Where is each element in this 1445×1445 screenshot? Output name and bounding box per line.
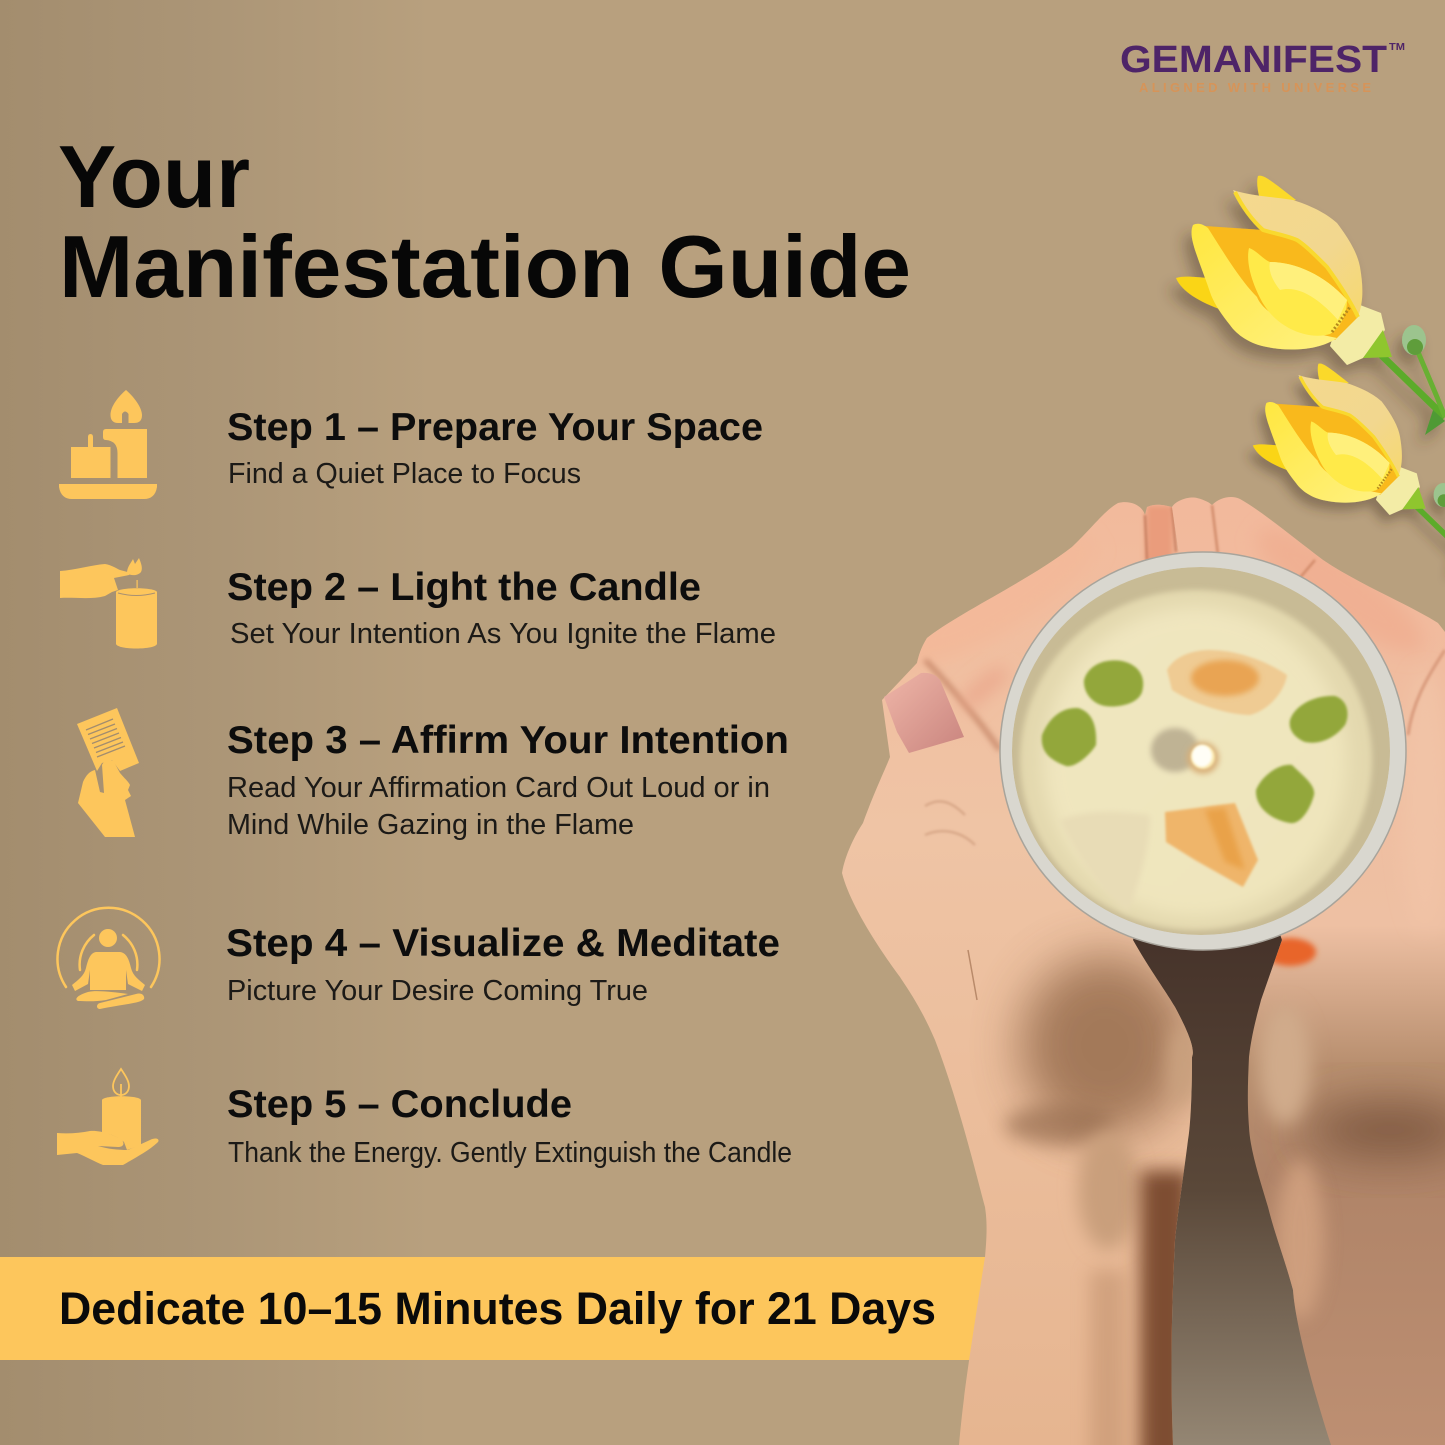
banner: daily commitment: Dedicate 10–15 Minutes Daily for 21 Days <box>59 1283 936 1334</box>
step 5 text <box>227 1083 792 1169</box>
step 4 text <box>226 922 780 1007</box>
orange crystal, bottom <box>1165 803 1258 887</box>
step 3 text: Read Your Affirmation Card Out Loud or in <box>227 772 770 804</box>
logo: Gemanifest: GEMANIFEST <box>1120 39 1387 81</box>
title: Your <box>58 127 250 226</box>
green crystals <box>1042 660 1348 823</box>
step 2 text <box>227 566 776 650</box>
candle tin rim <box>1000 552 1406 950</box>
icon: candles on tray <box>59 390 157 499</box>
flower branch, upper <box>1176 176 1445 435</box>
step 5 text: Thank the Energy. Gently Extinguish the Candle <box>228 1137 792 1169</box>
logo: Gemanifest: ALIGNED WITH UNIVERSE <box>1139 80 1371 95</box>
step 1 text: Find a Quiet Place to Focus <box>228 458 581 490</box>
banner: daily commitment <box>0 1257 990 1360</box>
step 1 text: Step 1 – Prepare Your Space <box>227 406 763 449</box>
icon: meditating figure <box>57 908 160 1009</box>
left thumb nail <box>884 673 964 753</box>
step 4 text: Picture Your Desire Coming True <box>227 975 648 1007</box>
right hand <box>1172 497 1445 1445</box>
step 1 text <box>227 406 763 490</box>
icon: hand lighting candle <box>60 558 157 648</box>
logo: Gemanifest: TM <box>1389 42 1405 53</box>
step 5 text: Step 5 – Conclude <box>227 1083 572 1126</box>
step 3 text: Step 3 – Affirm Your Intention <box>227 719 789 762</box>
step 3 text <box>227 719 789 841</box>
step 4 text: Step 4 – Visualize & Meditate <box>226 922 780 965</box>
wax crystal, pale <box>1068 814 1148 890</box>
candle wax surface <box>1012 567 1390 935</box>
wick dimple and flame <box>1151 728 1219 774</box>
left hand <box>842 502 1200 1445</box>
step 2 text: Set Your Intention As You Ignite the Flame <box>230 618 776 650</box>
icon: candle on open hand <box>57 1069 159 1165</box>
step 2 text: Step 2 – Light the Candle <box>227 566 701 609</box>
flower branch, lower <box>1253 363 1445 571</box>
orange crystal, top <box>1167 650 1287 715</box>
logo: Gemanifest <box>1120 39 1405 95</box>
title: Manifestation Guide <box>59 217 911 316</box>
title <box>58 127 911 316</box>
dark gap between forearms <box>1125 935 1340 1445</box>
icon: hand holding affirmation card <box>77 708 139 837</box>
step 3 text: Mind While Gazing in the Flame <box>227 809 634 841</box>
